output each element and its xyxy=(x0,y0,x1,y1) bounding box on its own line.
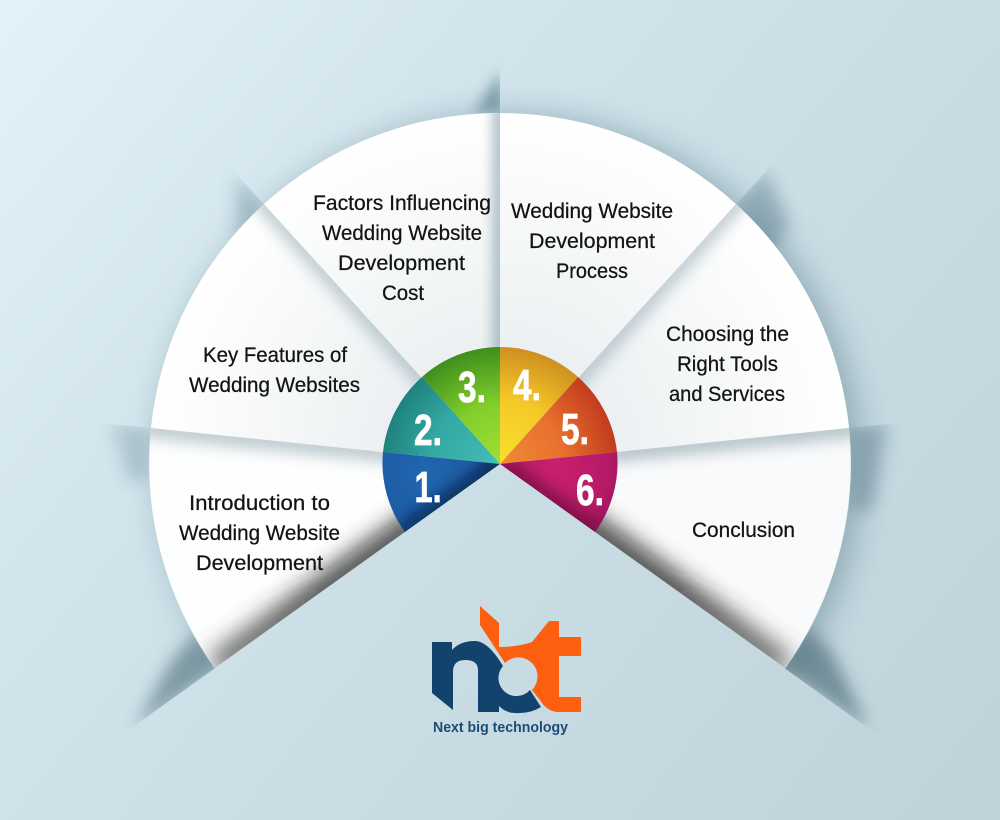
label: sector 2 xyxy=(189,344,360,397)
label: sector 3: Development xyxy=(338,252,465,275)
segment 4 xyxy=(500,347,578,464)
label: sector 3 xyxy=(313,192,491,305)
label: sector 2: Key Features of xyxy=(203,344,347,367)
label: sector 6: Conclusion xyxy=(692,519,795,542)
wheel outer shadow xyxy=(110,70,894,727)
segment 2 xyxy=(383,377,500,464)
label: sector 4: Development xyxy=(529,230,655,253)
label: sector 1: Wedding Website xyxy=(179,522,340,545)
chart: coloured number wheel xyxy=(382,347,618,532)
logo text: Next big technology xyxy=(433,720,568,736)
panel: sector 6 xyxy=(490,427,860,668)
label: sector 4 xyxy=(511,200,673,283)
wedge shadow on segments 1 and 6 xyxy=(405,464,595,532)
panel: sector 5 xyxy=(578,204,849,452)
number 4: 4. xyxy=(513,362,541,410)
panel: sector 1 xyxy=(140,427,510,668)
label: sector 5 xyxy=(666,323,789,406)
segment 6 xyxy=(500,452,618,532)
panel: bottom wedge xyxy=(0,464,1000,820)
number 6: 6. xyxy=(576,467,604,515)
panel: sector 3 xyxy=(264,113,500,378)
number 2: 2. xyxy=(414,407,442,455)
label: sector 3: Factors Influencing xyxy=(313,192,491,215)
label: sector 3: Wedding Website xyxy=(322,222,482,245)
panel: sector 4 xyxy=(500,113,736,464)
logo mark xyxy=(432,606,581,713)
number 5: 5. xyxy=(561,406,589,454)
label: sector 1: Development xyxy=(196,552,323,575)
label: sector 5: and Services xyxy=(669,383,785,406)
logo: Next big technology xyxy=(432,606,581,736)
label: sector 2: Wedding Websites xyxy=(189,374,360,397)
segment 1 xyxy=(382,452,500,532)
number 3: 3. xyxy=(458,364,486,412)
label: sector 1: Introduction to xyxy=(189,492,330,515)
label: sector 4: Process xyxy=(556,260,628,283)
label: sector 5: Choosing the xyxy=(666,323,789,346)
label: sector 1 xyxy=(179,492,340,575)
label: sector 3: Cost xyxy=(382,282,424,305)
label: sector 4: Wedding Website xyxy=(511,200,673,223)
label: sector 5: Right Tools xyxy=(677,353,778,376)
segment 5 xyxy=(500,377,617,464)
panel: sector 2 xyxy=(151,204,421,452)
number 1: 1. xyxy=(414,463,442,512)
segment 3 xyxy=(422,347,500,464)
